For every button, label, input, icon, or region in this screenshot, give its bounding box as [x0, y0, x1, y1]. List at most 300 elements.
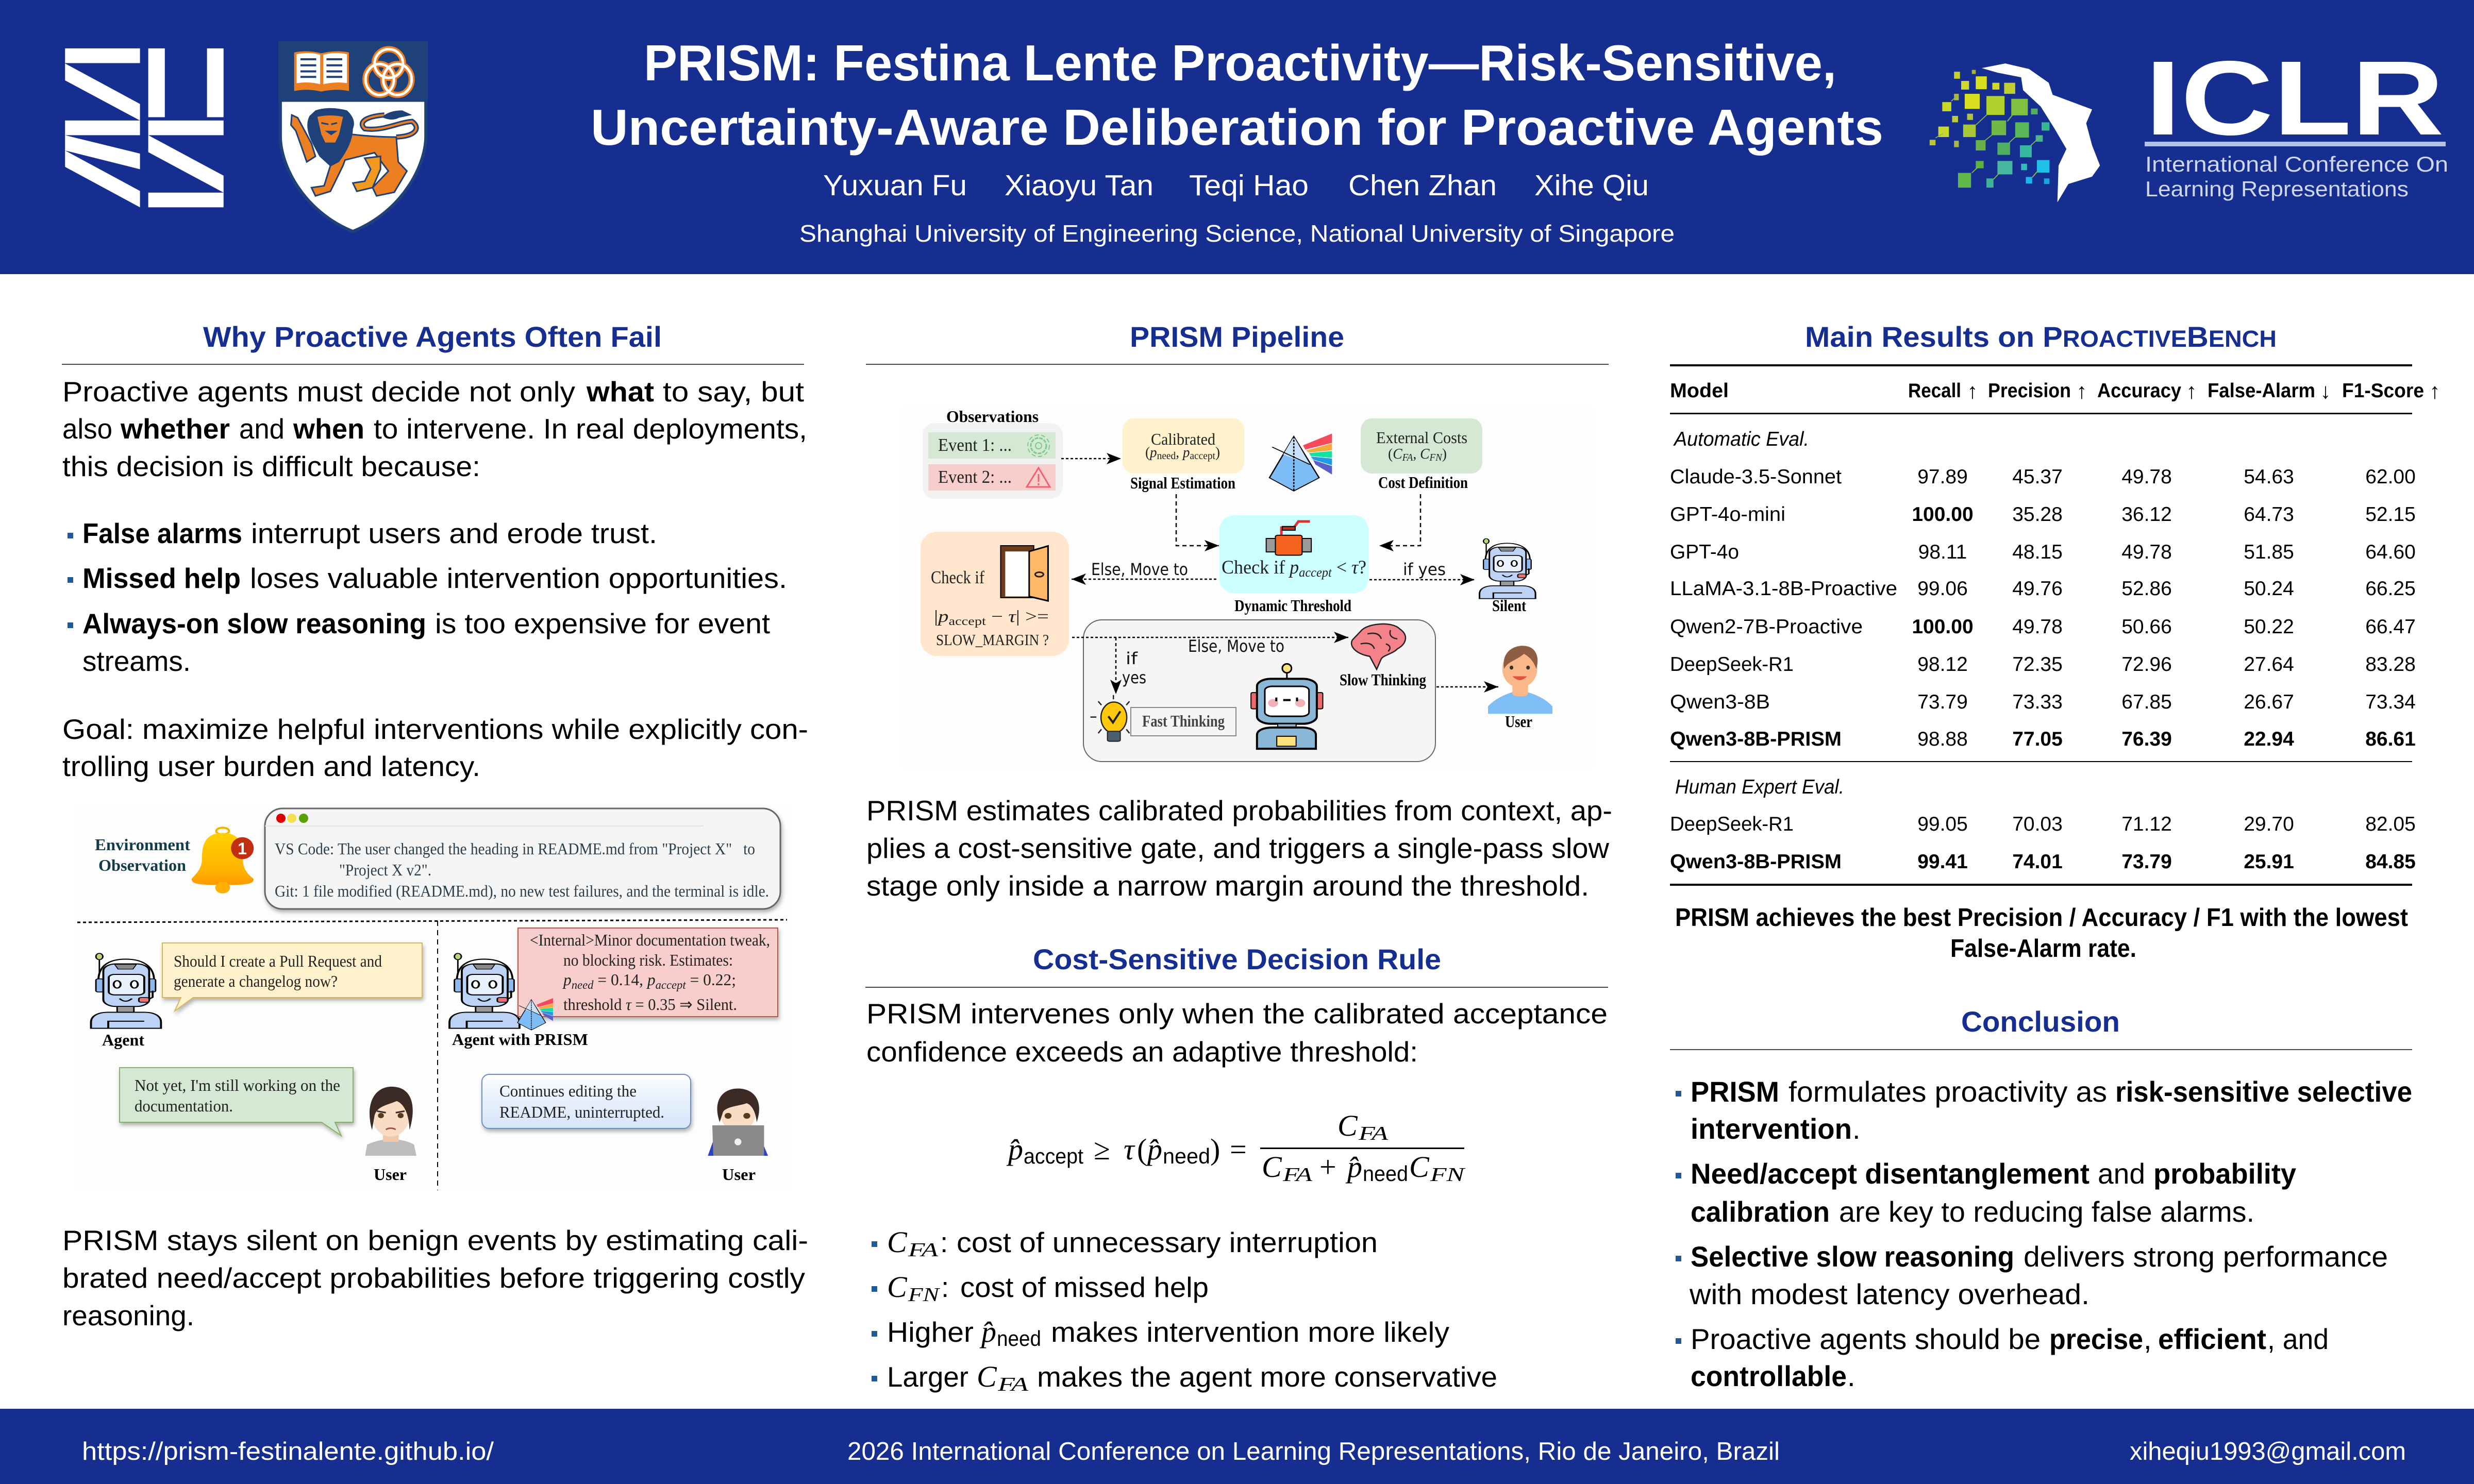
- observation window: VS Code: The user changed the heading in README.md from "Project X" to: [275, 839, 755, 858]
- intro paragraph: whether: [120, 413, 230, 445]
- speech bubble: agent question: Should I create a Pull Request and: [174, 952, 382, 970]
- row: LLaMA-3.1-8B-Proactive: 99.06: [1917, 578, 1968, 600]
- box: cost definition: (C: [1388, 446, 1403, 462]
- flow diagram: pipeline: [902, 407, 1593, 768]
- box: slow margin check: Check if: [931, 567, 984, 587]
- intro paragraph: to say, but: [663, 376, 804, 408]
- formula: threshold rule: (: [1137, 1133, 1147, 1166]
- box: cost definition: FA: [1402, 452, 1413, 463]
- row: Qwen3-8B: 26.67: [2244, 691, 2294, 713]
- intro paragraph: [62, 376, 807, 482]
- box: cost definition: FN: [1429, 452, 1443, 463]
- bullet: precise efficient controllable: [1676, 1323, 2329, 1392]
- box: signal estimation: Signal Estimation: [1130, 474, 1235, 492]
- box: signal estimation: ): [1215, 445, 1220, 461]
- row: GPT-4o-mini: [1670, 503, 2416, 526]
- row: GPT-4o: 48.15: [2012, 541, 2063, 563]
- box: cost definition: [1361, 418, 1482, 492]
- row: DeepSeek-R1 human: [1670, 813, 2416, 835]
- bullet: selective slow reasoning: with modest latency overhead.: [1689, 1278, 2089, 1310]
- bullet list: rule interpretation: makes intervention more likely: [1051, 1316, 1450, 1348]
- heading: why proactive agents fail: Why Proactive Agents Often Fail: [203, 321, 662, 353]
- row: Qwen3-8B-PRISM human: 25.91: [2244, 851, 2294, 873]
- box: slow margin check: |p: [934, 608, 947, 626]
- row: DeepSeek-R1: 72.96: [2121, 653, 2172, 676]
- formula: threshold rule: p̂: [1145, 1133, 1162, 1166]
- bullet list: failure modes: [68, 517, 787, 677]
- table header row: [1670, 380, 2440, 403]
- table header row: Recall: [1908, 380, 1961, 402]
- bullet: precise efficient controllable: efficient: [2158, 1323, 2266, 1355]
- row: DeepSeek-R1 human: 70.03: [2012, 813, 2063, 835]
- pipeline description: PRISM estimates calibrated probabilities from context, ap-: [866, 795, 1612, 827]
- arrow: stage to user: [1436, 686, 1498, 687]
- row: Claude-3.5-Sonnet: 62.00: [2365, 466, 2416, 488]
- callout: internal reasoning: threshold τ = 0.35 ⇒ Silent.: [563, 995, 737, 1014]
- bullet list: rule interpretation: makes the agent more conservative: [1037, 1361, 1497, 1393]
- bullet list: rule interpretation: :: [941, 1271, 949, 1303]
- footer: conference: 2026 International Conference on Learning Representations, Rio de Janeiro, Brazil: [847, 1438, 1780, 1465]
- arrow: else move to margin check: Else, Move to: [1091, 560, 1188, 579]
- formula: threshold rule: ): [1210, 1133, 1220, 1166]
- arrow: else move to slow thinking: Else, Move to: [1188, 636, 1284, 656]
- table takeaway: PRISM achieves the best Precision / Accuracy / F1 with the lowest: [1675, 904, 2408, 932]
- row: Qwen3-8B: 73.33: [2012, 691, 2063, 713]
- row: Qwen3-8B-PRISM: 86.61: [2365, 728, 2416, 750]
- goal statement: trolling user burden and latency.: [62, 750, 480, 782]
- bullet list: failure modes: is too expensive for event: [435, 608, 770, 639]
- logo: ICLR pixel head: [1930, 63, 2100, 203]
- heading: PRISM pipeline: PRISM Pipeline: [1130, 321, 1344, 353]
- observations panel: [923, 407, 1063, 499]
- box: slow margin check: accept: [948, 615, 987, 628]
- row: Qwen3-8B-PRISM human: Qwen3-8B-PRISM: [1670, 851, 1842, 873]
- row: GPT-4o-mini: 64.73: [2244, 503, 2294, 526]
- intro paragraph: and: [239, 413, 285, 445]
- bullet: disentanglement and calibration: probability: [2153, 1157, 2296, 1190]
- row: DeepSeek-R1 human: 29.70: [2244, 813, 2294, 835]
- row: Claude-3.5-Sonnet: Claude-3.5-Sonnet: [1670, 466, 1842, 488]
- arrow: signal to threshold: [1176, 494, 1219, 546]
- row: LLaMA-3.1-8B-Proactive: 50.24: [2244, 578, 2294, 600]
- bullet list: failure modes: loses valuable intervention opportunities.: [250, 562, 787, 594]
- row: DeepSeek-R1: 72.35: [2012, 653, 2063, 676]
- bullet list: failure modes: streams.: [82, 645, 191, 677]
- callout: internal reasoning: [518, 928, 778, 1017]
- panel: why proactive agents often fail: [62, 321, 808, 1331]
- bullet: selective slow reasoning: delivers strong performance: [2024, 1240, 2388, 1273]
- formula: threshold rule: C: [1262, 1150, 1282, 1184]
- arrow: if yes to fast thinking: [1116, 637, 1146, 694]
- callout: internal reasoning: p: [646, 970, 656, 989]
- bullet list: rule interpretation: need: [997, 1326, 1041, 1351]
- box: signal estimation: need: [1157, 450, 1176, 462]
- box: signal estimation: (p: [1145, 445, 1157, 461]
- status box: user continues: [482, 1074, 691, 1128]
- table header row: ↑: [2076, 380, 2087, 403]
- table header row: ↑: [2430, 380, 2440, 403]
- speech bubble: user reply: Not yet, I'm still working on the: [135, 1076, 340, 1094]
- status box: user continues: README, uninterrupted.: [499, 1103, 664, 1121]
- bullet list: rule interpretation: cost of unnecessary interruption: [957, 1226, 1378, 1258]
- bullet list: rule interpretation: FN: [908, 1284, 941, 1306]
- row: Qwen3-8B: 73.79: [1917, 691, 1968, 713]
- affiliations: Shanghai University of Engineering Science, National University of Singapore: [799, 220, 1675, 247]
- results table: [1670, 364, 2440, 886]
- arrow: if yes to fast thinking: if: [1126, 649, 1138, 668]
- row: GPT-4o-mini: 52.15: [2365, 503, 2416, 526]
- row: Qwen2-7B-Proactive: 66.47: [2365, 616, 2416, 638]
- table header row: Precision: [1988, 380, 2071, 402]
- label: silent: Silent: [1492, 596, 1526, 615]
- icon: silent robot: [1479, 538, 1535, 599]
- row: GPT-4o: 98.11: [1918, 541, 1967, 563]
- bullet: risk-sensitive selective intervention: intervention: [1691, 1112, 1852, 1145]
- bullet list: failure modes: Always-on slow reasoning: [82, 608, 426, 639]
- table takeaway: False-Alarm rate.: [1950, 935, 2136, 963]
- observation window: [265, 808, 780, 909]
- row: Qwen2-7B-Proactive: 50.22: [2244, 616, 2294, 638]
- bullet: selective slow reasoning: [1676, 1240, 2388, 1310]
- box: dynamic threshold: [1219, 515, 1368, 615]
- icon: agent with PRISM robot: [449, 953, 520, 1028]
- formula: threshold rule: FN: [1430, 1164, 1466, 1186]
- box: signal estimation: ,: [1176, 445, 1183, 461]
- box: fast thinking: Fast Thinking: [1142, 712, 1225, 730]
- row: Claude-3.5-Sonnet: 54.63: [2244, 466, 2294, 488]
- observation window: "Project X v2".: [339, 861, 431, 879]
- row: GPT-4o: 64.60: [2365, 541, 2416, 563]
- intro paragraph: to intervene. In real deployments,: [374, 413, 807, 445]
- row: Qwen3-8B-PRISM human: 99.41: [1917, 851, 1968, 873]
- row: DeepSeek-R1 human: 82.05: [2365, 813, 2416, 835]
- formula: threshold rule: p̂: [1345, 1150, 1362, 1184]
- pipeline description: plies a cost-sensitive gate, and triggers a single-pass slow: [866, 832, 1609, 864]
- intro paragraph: what: [586, 376, 654, 408]
- bullet list: rule interpretation: cost of missed help: [960, 1271, 1209, 1303]
- row: Claude-3.5-Sonnet: 45.37: [2012, 466, 2063, 488]
- row: DeepSeek-R1: [1670, 653, 2416, 676]
- bullet: precise efficient controllable: Proactive agents should be: [1691, 1323, 2041, 1355]
- row: Qwen3-8B-PRISM: [1670, 728, 2416, 750]
- formula: threshold rule: accept: [1024, 1144, 1083, 1168]
- figure: agent vs agent with PRISM scenario: [77, 804, 789, 1190]
- row: Claude-3.5-Sonnet: 49.78: [2121, 466, 2172, 488]
- bullet: precise efficient controllable: ,: [2144, 1323, 2152, 1355]
- bullet list: rule interpretation: FA: [997, 1374, 1029, 1395]
- row: GPT-4o: 49.78: [2121, 541, 2172, 563]
- row: Qwen2-7B-Proactive: 100.00: [1912, 616, 1974, 638]
- row: Qwen3-8B-PRISM human: 84.85: [2365, 851, 2416, 873]
- formula: threshold rule: +: [1319, 1150, 1336, 1184]
- table header row: Model: [1670, 380, 1729, 402]
- row: Qwen2-7B-Proactive: Qwen2-7B-Proactive: [1670, 616, 1863, 638]
- section label: human expert eval: Human Expert Eval.: [1675, 776, 1844, 798]
- authors: [823, 169, 1649, 202]
- speech bubble: user reply: [120, 1068, 353, 1136]
- box: cost definition: Cost Definition: [1378, 473, 1468, 492]
- formula: threshold rule: C: [1409, 1150, 1430, 1184]
- row: DeepSeek-R1 human: 71.12: [2121, 813, 2172, 835]
- bullet: disentanglement and calibration: calibration: [1691, 1195, 1830, 1228]
- panel: cost-sensitive decision rule: [865, 943, 1608, 1395]
- box: slow margin check: SLOW_MARGIN ?: [936, 631, 1049, 649]
- closing paragraph: [62, 1224, 808, 1331]
- icon: small prism: [517, 998, 553, 1030]
- box: fast thinking: [1131, 707, 1236, 736]
- bullet: risk-sensitive selective intervention: formulates proactivity as: [1788, 1075, 2107, 1108]
- formula: threshold rule: =: [1230, 1133, 1247, 1166]
- row: Qwen3-8B-PRISM human: [1670, 851, 2416, 873]
- authors: Teqi Hao: [1189, 169, 1309, 202]
- intro paragraph: this decision is difficult because:: [62, 450, 480, 482]
- logo: ICLR wordmark: International Conference On: [2145, 152, 2448, 176]
- callout: internal reasoning: no blocking risk. Estimates:: [563, 951, 733, 969]
- row: LLaMA-3.1-8B-Proactive: 49.76: [2012, 578, 2063, 600]
- closing paragraph: PRISM stays silent on benign events by estimating cali-: [62, 1224, 808, 1256]
- section label: automatic eval: Automatic Eval.: [1673, 428, 1809, 450]
- formula: threshold rule: p̂: [1006, 1133, 1023, 1166]
- bullet list: rule interpretation: C: [977, 1360, 997, 1393]
- row: LLaMA-3.1-8B-Proactive: LLaMA-3.1-8B-Proactive: [1670, 578, 1897, 600]
- box: dynamic threshold: τ?: [1351, 557, 1366, 578]
- bullet: risk-sensitive selective intervention: .: [1852, 1112, 1861, 1145]
- rule description: confidence exceeds an adaptive threshold:: [866, 1036, 1418, 1068]
- logo: ICLR wordmark: Learning Representations: [2145, 177, 2409, 201]
- bullet list: rule interpretation: Higher: [887, 1316, 974, 1348]
- goal statement: Goal: maximize helpful interventions while explicitly con-: [62, 713, 808, 745]
- formula: threshold rule: FA: [1358, 1123, 1389, 1144]
- authors: Yuxuan Fu: [823, 169, 967, 202]
- panel: main results: [1670, 321, 2440, 963]
- label: user: User: [374, 1165, 407, 1184]
- heading: conclusion: Conclusion: [1961, 1005, 2120, 1038]
- label: user with laptop: User: [722, 1165, 756, 1184]
- icon: brain: [1351, 624, 1406, 669]
- callout: internal reasoning: need: [572, 979, 594, 991]
- box: signal estimation: [1123, 418, 1244, 492]
- label: slow thinking: Slow Thinking: [1340, 670, 1426, 689]
- intro paragraph: when: [293, 413, 364, 445]
- row: LLaMA-3.1-8B-Proactive: 66.25: [2365, 578, 2416, 600]
- box: signal estimation: Calibrated: [1151, 430, 1215, 448]
- icon: annoyed user: [365, 1087, 416, 1156]
- box: slow margin check: [921, 532, 1069, 656]
- box: dynamic threshold: Check if p: [1222, 557, 1299, 578]
- bullet list: rule interpretation: C: [887, 1225, 908, 1259]
- row: GPT-4o: 51.85: [2244, 541, 2294, 563]
- observations panel: Observations: [946, 407, 1039, 426]
- formula: threshold rule: [1006, 1109, 1466, 1186]
- footer: email: xiheqiu1993@gmail.com: [2130, 1438, 2406, 1465]
- table header row: ↑: [1967, 380, 1978, 403]
- observation window: Git: 1 file modified (README.md), no new test failures, and the terminal is idle.: [275, 882, 769, 900]
- bullet: disentanglement and calibration: are key to reducing false alarms.: [1839, 1195, 2254, 1228]
- bullet list: rule interpretation: C: [887, 1270, 908, 1304]
- title: Uncertainty-Aware Deliberation for Proactive Agents: [591, 99, 1883, 156]
- icon: light bulb: [1091, 695, 1129, 741]
- bullet list: rule interpretation: FA: [908, 1239, 939, 1261]
- bullet: precise efficient controllable: .: [1847, 1360, 1855, 1392]
- title: [591, 35, 1883, 156]
- bullet: disentanglement and calibration: Need/accept disentanglement: [1691, 1157, 2089, 1190]
- formula: threshold rule: ≥: [1094, 1133, 1110, 1166]
- panel: PRISM pipeline: [866, 321, 1612, 902]
- rule description: [866, 998, 1608, 1068]
- footer band: [0, 1409, 2474, 1484]
- row: GPT-4o-mini: GPT-4o-mini: [1670, 503, 1785, 526]
- closing paragraph: brated need/accept probabilities before triggering costly: [62, 1262, 806, 1294]
- observations panel: Event 2: ...: [938, 467, 1012, 487]
- arrow: if yes to fast thinking: yes: [1122, 668, 1146, 687]
- rule description: PRISM intervenes only when the calibrated acceptance: [866, 998, 1608, 1030]
- formula: threshold rule: need: [1163, 1144, 1210, 1168]
- label: environment observation: Environment: [95, 835, 190, 854]
- row: GPT-4o: [1670, 541, 2416, 563]
- row: DeepSeek-R1 human: 99.05: [1917, 813, 1968, 835]
- icon: prism: [1269, 433, 1332, 491]
- panel: conclusion: [1670, 1005, 2412, 1392]
- label: environment observation: [95, 835, 190, 874]
- box: dynamic threshold: accept: [1299, 566, 1332, 580]
- callout: internal reasoning: p: [562, 970, 572, 989]
- box: dynamic threshold: Dynamic Threshold: [1234, 596, 1351, 615]
- row: GPT-4o-mini: 36.12: [2121, 503, 2172, 526]
- bullet: risk-sensitive selective intervention: [1676, 1075, 2412, 1145]
- icon: notification bell: [192, 828, 254, 893]
- row: GPT-4o: GPT-4o: [1670, 541, 1739, 563]
- row: LLaMA-3.1-8B-Proactive: 52.86: [2121, 578, 2172, 600]
- row: Qwen2-7B-Proactive: [1670, 616, 2416, 638]
- bullet list: rule interpretation: :: [940, 1226, 948, 1258]
- row: DeepSeek-R1: 83.28: [2365, 653, 2416, 676]
- heading: main results: Main Results on P ROACTIVEBENCH: [1805, 321, 2277, 353]
- heading: decision rule: Cost-Sensitive Decision Rule: [1033, 943, 1441, 975]
- logo: ICLR wordmark: ICLR: [2145, 39, 2444, 157]
- table header row: F1-Score: [2342, 380, 2424, 402]
- bullet list: rule interpretation: p̂: [979, 1315, 996, 1348]
- arrow: observations to signal estimation: [1061, 458, 1121, 459]
- row: Qwen3-8B-PRISM: 76.39: [2121, 728, 2172, 750]
- label: agent: Agent: [102, 1031, 144, 1049]
- arrow: cost to threshold: [1379, 494, 1420, 546]
- authors: Xihe Qiu: [1534, 169, 1649, 202]
- bullet: precise efficient controllable: controllable: [1691, 1360, 1847, 1392]
- box: cost definition: ): [1442, 446, 1447, 462]
- label: agent with PRISM: Agent with PRISM: [452, 1030, 588, 1049]
- box: thinking stage: [1083, 620, 1435, 762]
- row: Claude-3.5-Sonnet: [1670, 466, 2416, 488]
- icon: user: [1488, 646, 1552, 714]
- formula: threshold rule: τ: [1124, 1133, 1135, 1166]
- box: slow margin check: −: [986, 608, 1008, 626]
- row: DeepSeek-R1: DeepSeek-R1: [1670, 653, 1794, 676]
- row: LLaMA-3.1-8B-Proactive: [1670, 578, 2416, 600]
- formula: threshold rule: FA: [1282, 1164, 1313, 1186]
- row: Qwen3-8B: 67.85: [2121, 691, 2172, 713]
- row: Qwen3-8B-PRISM: Qwen3-8B-PRISM: [1670, 728, 1842, 750]
- observations panel: Event 1: ...: [938, 435, 1012, 455]
- row: Qwen3-8B-PRISM: 22.94: [2244, 728, 2294, 750]
- box: dynamic threshold: <: [1332, 557, 1351, 578]
- pipeline description: [866, 795, 1612, 902]
- bullet: risk-sensitive selective intervention: risk-sensitive selective: [2115, 1075, 2412, 1108]
- closing paragraph: reasoning.: [62, 1300, 194, 1331]
- box: signal estimation: accept: [1190, 450, 1215, 462]
- box: signal estimation: p: [1182, 445, 1190, 461]
- status box: user continues: Continues editing the: [499, 1082, 637, 1100]
- table header row: ↑: [2186, 380, 2197, 403]
- formula: threshold rule: C: [1338, 1109, 1358, 1142]
- row: Qwen3-8B-PRISM human: 73.79: [2121, 851, 2172, 873]
- callout: internal reasoning: = 0.22;: [686, 970, 736, 989]
- box: cost definition: ,: [1413, 446, 1420, 462]
- formula: threshold rule: need: [1363, 1161, 1408, 1186]
- logo: ICLR wordmark: [2145, 39, 2448, 201]
- label: environment observation: Observation: [98, 856, 186, 874]
- row: Claude-3.5-Sonnet: 97.89: [1917, 466, 1968, 488]
- title: PRISM: Festina Lente Proactivity—Risk-Sensitive,: [644, 35, 1836, 91]
- bullet: precise efficient controllable: , and: [2267, 1323, 2329, 1355]
- row: Qwen3-8B-PRISM: 98.88: [1917, 728, 1968, 750]
- row: Qwen2-7B-Proactive: 50.66: [2121, 616, 2172, 638]
- header band: [0, 0, 2474, 274]
- bullet list: failure modes: Missed help: [82, 562, 241, 594]
- table takeaway: [1675, 904, 2408, 963]
- row: Qwen3-8B: 73.34: [2365, 691, 2416, 713]
- box: slow margin check: τ| >=: [1008, 608, 1043, 626]
- row: Qwen3-8B-PRISM human: 74.01: [2012, 851, 2063, 873]
- row: GPT-4o-mini: 100.00: [1912, 503, 1974, 526]
- speech bubble: user reply: documentation.: [135, 1097, 233, 1115]
- callout: internal reasoning: accept: [656, 979, 686, 991]
- icon: thinking robot: [1251, 664, 1323, 749]
- icon: user with laptop: [708, 1088, 768, 1156]
- callout: internal reasoning: = 0.14,: [593, 970, 647, 989]
- table header row: Accuracy: [2097, 380, 2181, 402]
- arrow: if yes to silent: if yes: [1403, 560, 1446, 579]
- icon: notification bell: 1: [238, 839, 247, 858]
- label: user: User: [1505, 712, 1532, 731]
- bullet list: failure modes: False alarms: [82, 517, 242, 549]
- speech bubble: agent question: generate a changelog now?: [174, 972, 338, 990]
- intro paragraph: also: [62, 413, 112, 445]
- footer: project url: https://prism-festinalente.github.io/: [82, 1438, 494, 1465]
- logo: university crest shield: [278, 41, 428, 231]
- icon: agent robot: [91, 953, 161, 1028]
- bullet: disentanglement and calibration: [1676, 1157, 2296, 1228]
- row: Qwen3-8B-PRISM: 77.05: [2012, 728, 2063, 750]
- authors: Xiaoyu Tan: [1005, 169, 1154, 202]
- row: Qwen3-8B: Qwen3-8B: [1670, 691, 1770, 713]
- bullet: disentanglement and calibration: and: [2098, 1157, 2145, 1190]
- intro paragraph: Proactive agents must decide not only: [62, 376, 576, 408]
- logo: university monogram: [65, 48, 224, 207]
- bullet list: failure modes: interrupt users and erode trust.: [251, 517, 657, 549]
- box: cost definition: C: [1420, 446, 1430, 462]
- bullet: selective slow reasoning: Selective slow reasoning: [1691, 1240, 2014, 1273]
- bullet: risk-sensitive selective intervention: PRISM: [1691, 1075, 1779, 1108]
- bullet list: rule interpretation: [872, 1225, 1497, 1395]
- bullet list: rule interpretation: Larger: [887, 1361, 968, 1393]
- callout: internal reasoning: <Internal>Minor documentation tweak,: [530, 931, 770, 949]
- bullet: precise efficient controllable: precise: [2049, 1323, 2143, 1355]
- row: DeepSeek-R1 human: DeepSeek-R1: [1670, 813, 1794, 835]
- pipeline description: stage only inside a narrow margin around the threshold.: [866, 870, 1589, 902]
- box: cost definition: External Costs: [1376, 428, 1467, 447]
- row: DeepSeek-R1: 98.12: [1917, 653, 1968, 676]
- table header row: False-Alarm: [2208, 380, 2315, 402]
